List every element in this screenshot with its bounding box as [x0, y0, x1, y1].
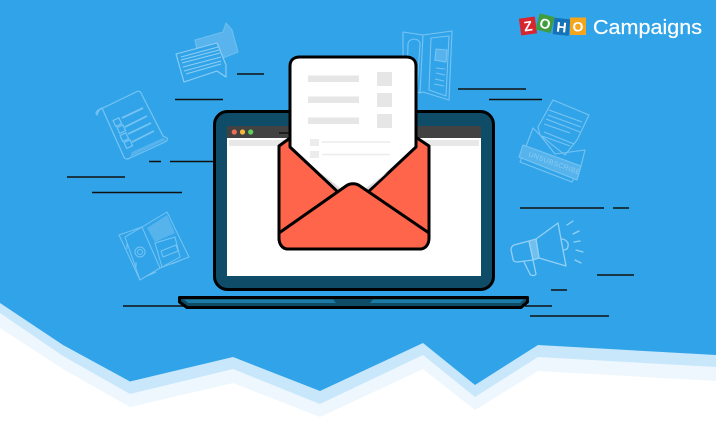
logo: O tile: O — [538, 14, 552, 33]
logo: Z tile — [519, 16, 537, 36]
icon: open door — [403, 31, 452, 100]
icon: unsubscribe envelope: UNSUBSCRIBE — [527, 151, 581, 177]
laptop screen — [227, 126, 481, 276]
laptop — [180, 112, 528, 308]
speed lines — [67, 74, 634, 316]
envelope back — [279, 138, 429, 249]
logo: second O tile — [570, 18, 586, 35]
icon: unsubscribe envelope — [519, 100, 589, 182]
envelope with letter — [279, 57, 429, 249]
icon: megaphone — [511, 221, 583, 276]
letter paper — [290, 57, 416, 192]
icon: checklist scroll — [96, 91, 167, 159]
logo: second O tile: O — [573, 18, 584, 34]
logo: O tile — [536, 13, 555, 33]
laptop body — [214, 112, 494, 290]
logo: wordmark: Campaigns — [593, 16, 702, 39]
laptop base — [180, 298, 528, 308]
logo: Zoho Campaigns — [519, 13, 702, 39]
logo: Z tile: Z — [523, 17, 534, 35]
icon: safe — [119, 212, 189, 280]
icon: chat bubbles — [176, 23, 238, 82]
envelope front flap — [279, 184, 429, 249]
logo: H tile: H — [556, 19, 567, 36]
logo: H tile — [553, 18, 570, 36]
